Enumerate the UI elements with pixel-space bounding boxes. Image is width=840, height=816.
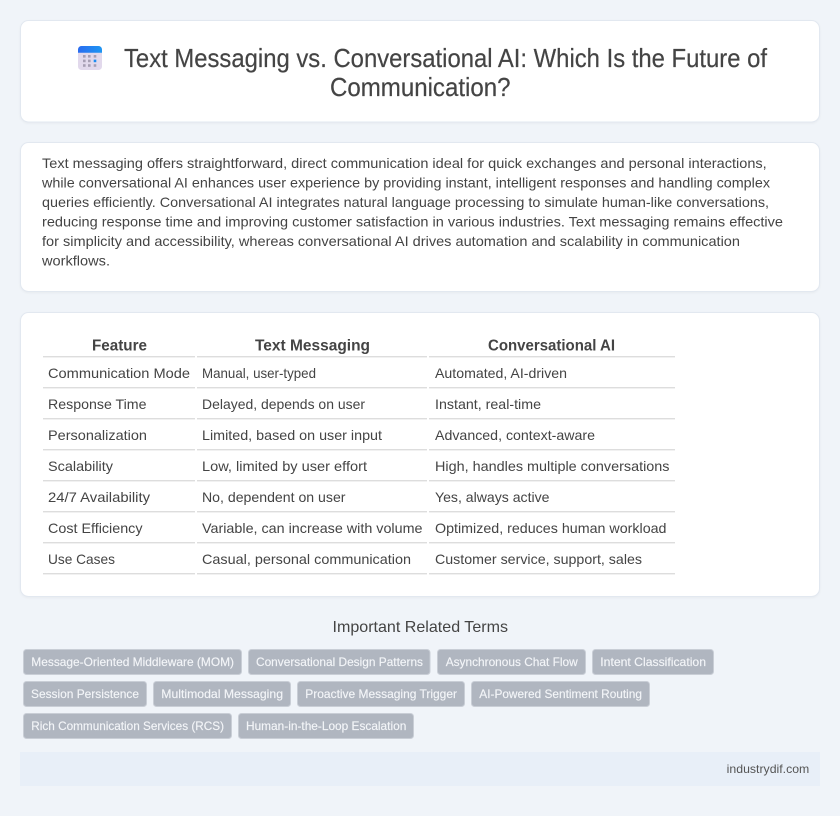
row: use cases (48, 551, 642, 567)
tag: asynchronous chat flow: Asynchronous Chat Flow (446, 655, 578, 669)
row: response time: Instant, real-time (435, 396, 541, 412)
row: scalability: Scalability (48, 458, 113, 474)
text block: description paragraph: while conversational AI enhances user experience by providing instant, intelligent responses and handling complex (41, 174, 770, 190)
row: personalization (48, 427, 595, 443)
tag: message-oriented middleware: Message-Oriented Middleware (MOM) (31, 655, 234, 669)
row: cost efficiency: Variable, can increase with volume (202, 520, 423, 536)
row: communication mode (48, 365, 567, 381)
footer (20, 752, 820, 786)
row: communication mode: Communication Mode (48, 365, 190, 381)
row: use cases: Customer service, support, sales (435, 551, 642, 567)
table header (92, 338, 615, 354)
title: Communication? (330, 72, 510, 102)
text block: description paragraph: Text messaging offers straightforward, direct communication ideal for quick exchanges and personal interactions, (42, 155, 767, 171)
row: scalability: High, handles multiple conversations (435, 458, 670, 474)
tag: ai-powered sentiment routing (472, 682, 650, 706)
row: communication mode: Manual, user-typed (202, 365, 316, 381)
text block: description paragraph (41, 155, 783, 268)
title (124, 43, 768, 102)
row: 24/7 availability: No, dependent on user (202, 489, 346, 505)
title: Text Messaging vs. Conversational AI: Which Is the Future of (124, 43, 768, 73)
table header: Text Messaging (255, 338, 370, 354)
row: cost efficiency: Cost Efficiency (48, 520, 142, 536)
row: cost efficiency (48, 520, 666, 536)
text block: description paragraph: reducing response time and improving customer satisfaction in various industries. Text messaging remains effective (42, 213, 783, 229)
tag: proactive messaging trigger (298, 682, 464, 706)
tag: rich communication services (24, 714, 232, 738)
row: response time: Response Time (48, 396, 147, 412)
tag: intent classification (592, 650, 714, 674)
row: cost efficiency: Optimized, reduces human workload (435, 520, 666, 536)
panel: comparison table (20, 312, 820, 596)
text block: description paragraph: queries efficiently. Conversational AI integrates natural language processing to simulate human-like conversations, (42, 194, 769, 210)
row: response time (48, 396, 541, 412)
tag: session persistence: Session Persistence (31, 687, 139, 701)
tag: conversational design patterns (248, 650, 430, 674)
heading: important related terms: Important Related Terms (332, 619, 508, 636)
table header: Conversational AI (488, 338, 615, 354)
tag: rich communication services: Rich Communication Services (RCS) (31, 719, 224, 733)
tag: intent classification: Intent Classification (600, 655, 706, 669)
row: 24/7 availability: Yes, always active (435, 489, 550, 505)
text block: description paragraph: for simplicity and accessibility, whereas conversational AI drives automation and scalability in communication (42, 233, 740, 249)
row: personalization: Advanced, context-aware (435, 427, 595, 443)
text block: description paragraph: workflows. (41, 252, 110, 268)
tag: human-in-the-loop escalation (238, 714, 414, 738)
table header: Feature (92, 338, 147, 354)
row: 24/7 availability: 24/7 Availability (48, 489, 150, 505)
icon: calendar (78, 46, 102, 70)
row: 24/7 availability (48, 489, 550, 505)
row: communication mode: Automated, AI-driven (435, 365, 567, 381)
tag: asynchronous chat flow (438, 650, 586, 674)
panel: header (20, 20, 820, 122)
tag: session persistence (24, 682, 146, 706)
tag: multimodal messaging: Multimodal Messaging (161, 687, 283, 701)
tag: ai-powered sentiment routing: AI-Powered Sentiment Routing (479, 687, 642, 701)
tag: human-in-the-loop escalation: Human-in-the-Loop Escalation (246, 719, 406, 733)
row: scalability (48, 458, 670, 474)
row: personalization: Personalization (48, 427, 147, 443)
tag: conversational design patterns: Conversational Design Patterns (256, 655, 423, 669)
tag: multimodal messaging (154, 682, 290, 706)
tag: proactive messaging trigger: Proactive Messaging Trigger (305, 687, 457, 701)
footer: industrydif.com (727, 762, 809, 776)
row: scalability: Low, limited by user effort (202, 458, 367, 474)
panel: description (20, 142, 820, 292)
row: use cases: Casual, personal communication (202, 551, 411, 567)
row: personalization: Limited, based on user input (202, 427, 382, 443)
row: use cases: Use Cases (48, 551, 115, 567)
tag: message-oriented middleware (24, 650, 242, 674)
panel: related terms (24, 619, 714, 738)
row: response time: Delayed, depends on user (202, 396, 365, 412)
